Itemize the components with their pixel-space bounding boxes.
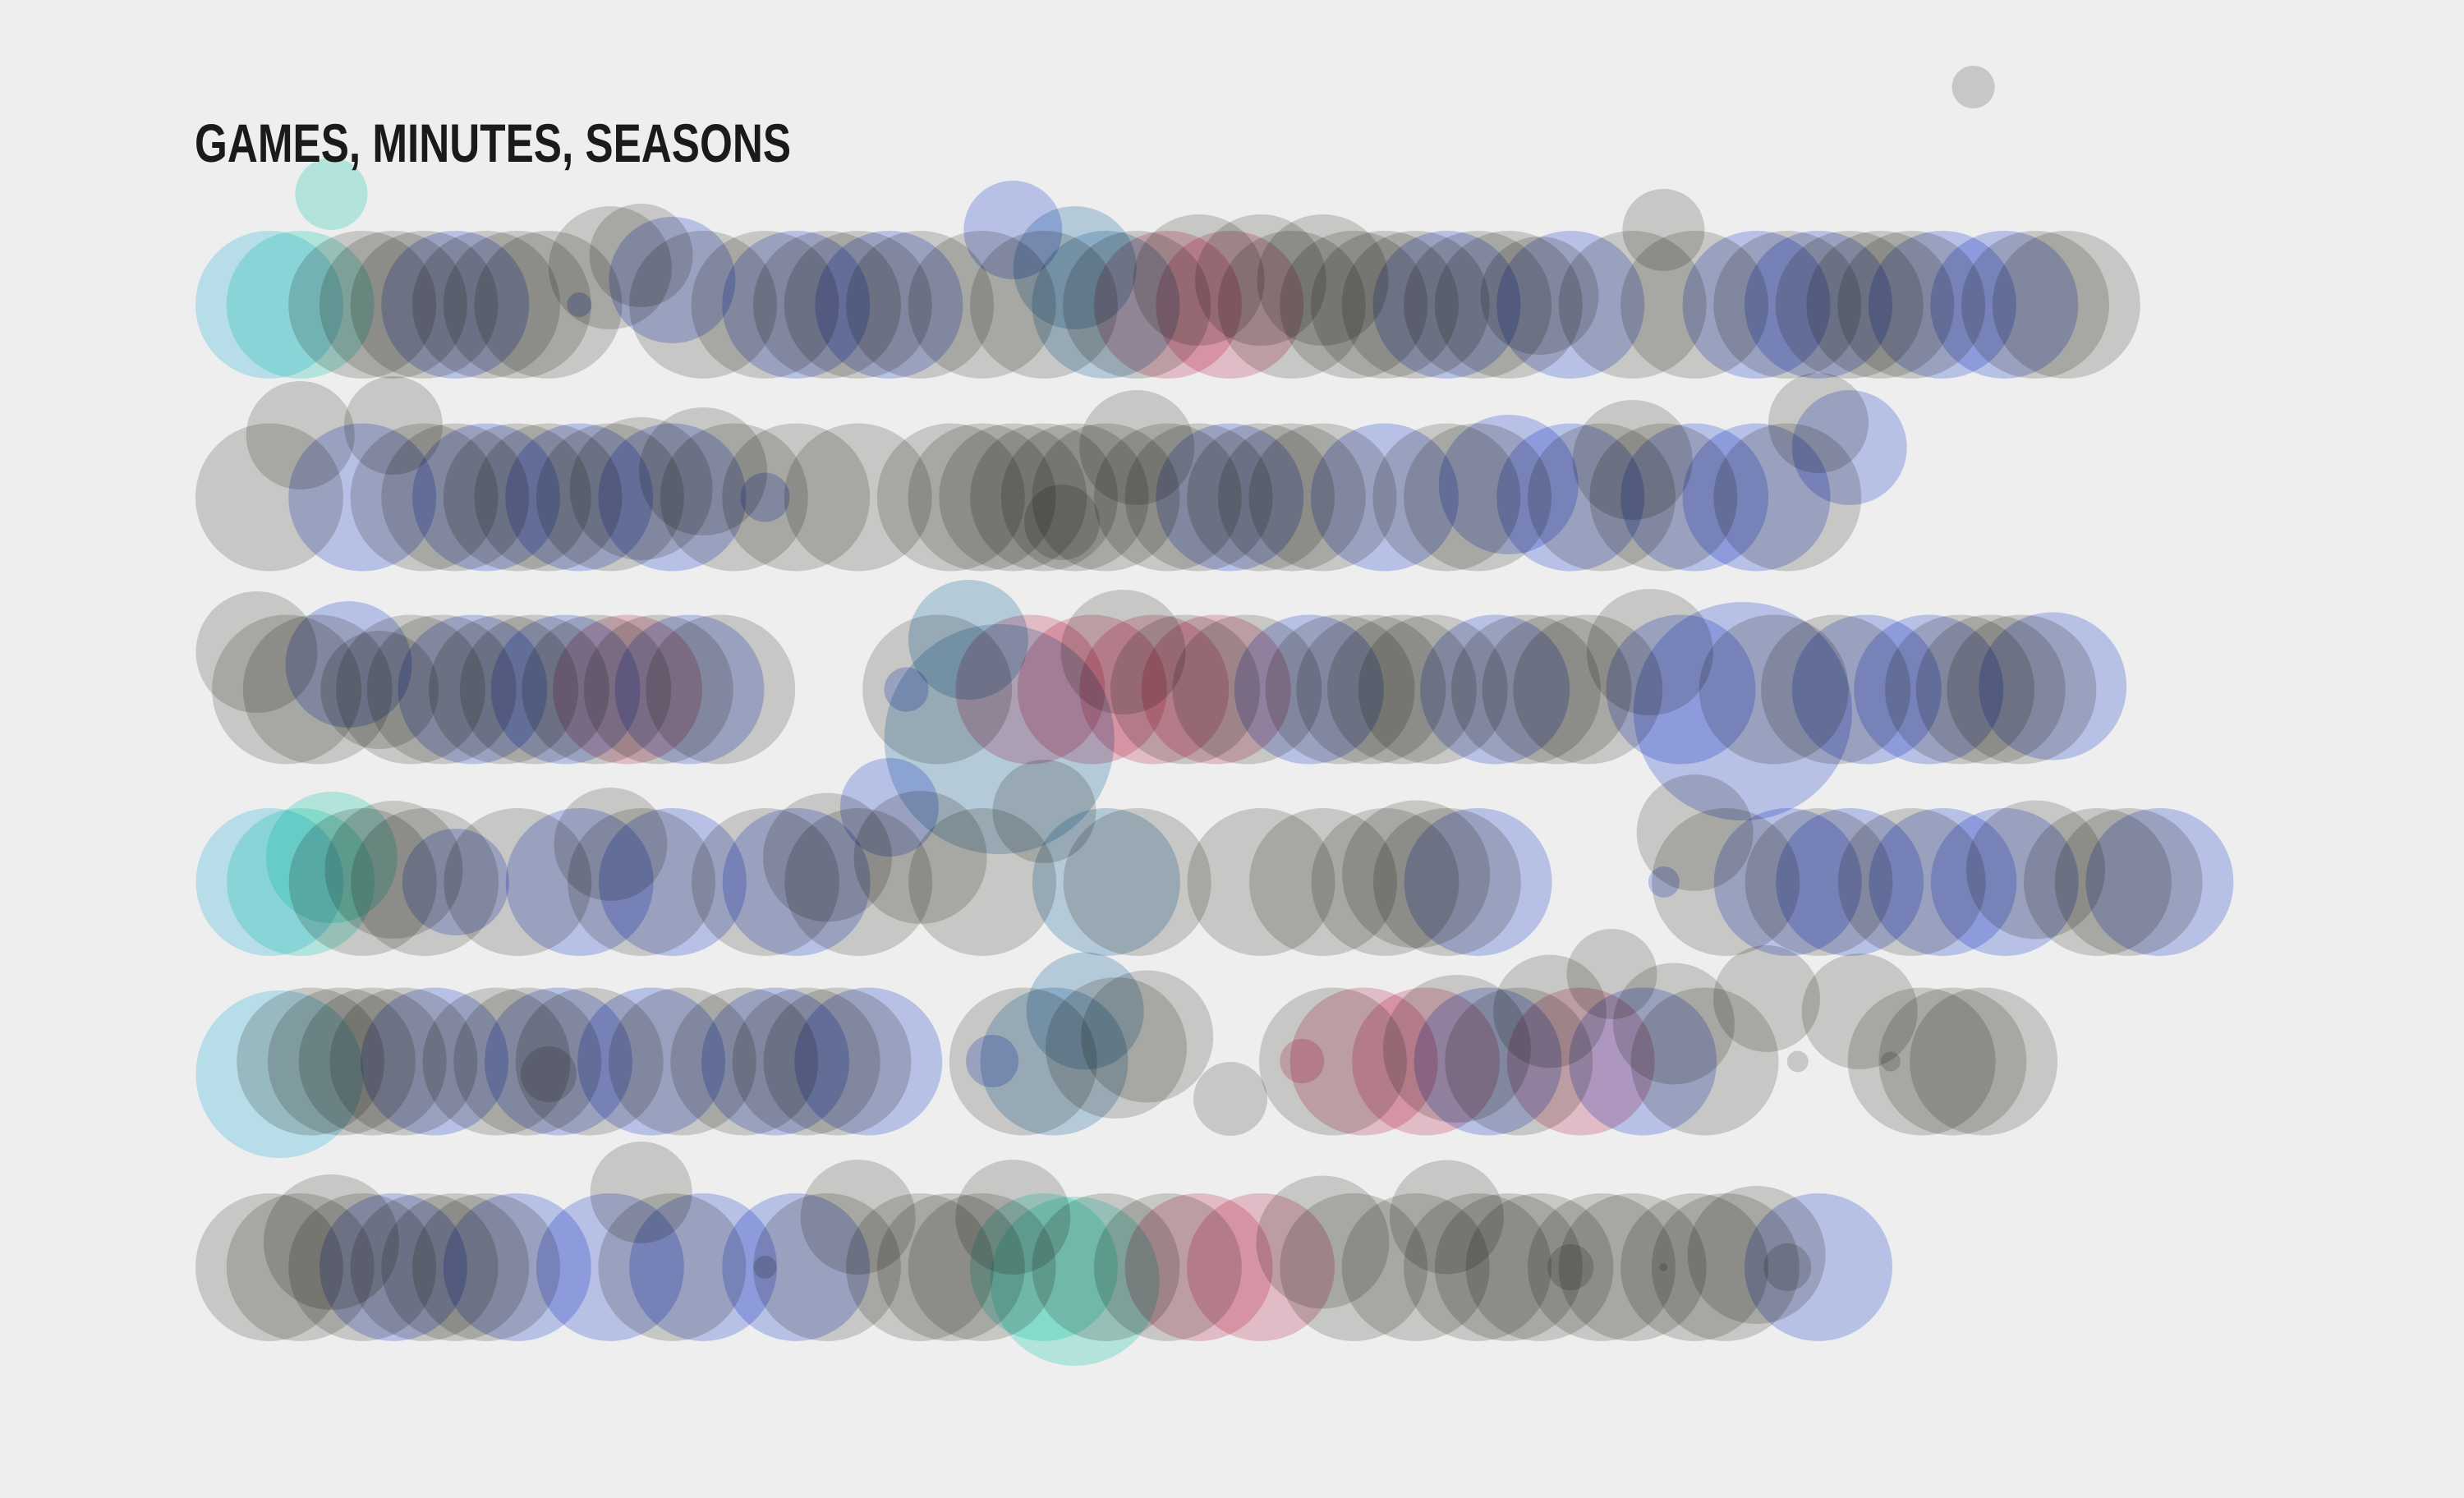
season row 5 xyxy=(195,929,2057,1158)
season row 1 xyxy=(195,66,2140,379)
season row 3 xyxy=(195,580,2126,854)
season row 4 xyxy=(195,758,2233,956)
title: GAMES, MINUTES, SEASONS xyxy=(195,113,791,173)
season row 2 xyxy=(195,373,1907,572)
season row 6 xyxy=(195,1142,1892,1366)
